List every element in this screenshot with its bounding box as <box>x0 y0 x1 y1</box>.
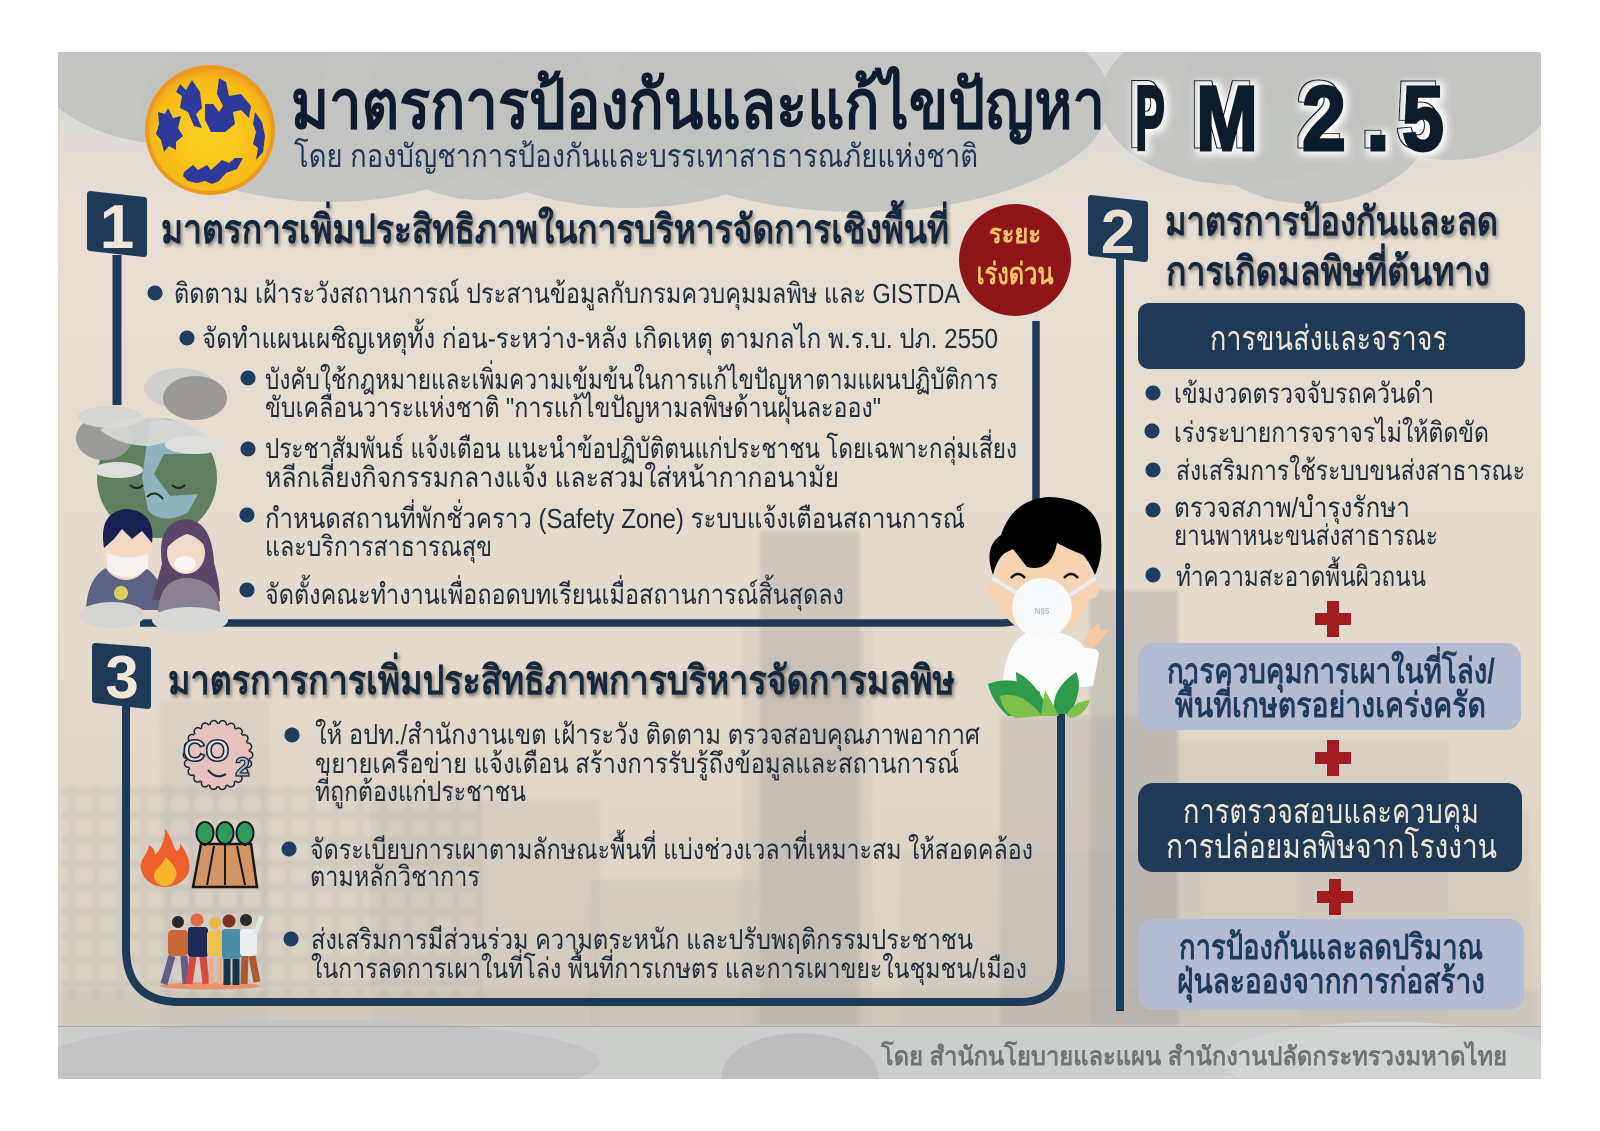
icon: CO2 cloud: CO <box>183 733 230 768</box>
section 1 bullet 2: จัดทำแผนเผชิญเหตุทั้ง ก่อน-ระหว่าง-หลัง เกิดเหตุ ตามกลไก พ.ร.บ. ปภ. 2550 <box>202 318 998 356</box>
icon: group of people <box>160 914 262 990</box>
subtitle: โดย กองบัญชาการป้องกันและบรรเทาสาธารณภัยแห่งชาติ <box>294 138 978 174</box>
box: open burning control <box>1138 643 1521 730</box>
section 2 badge: 2 <box>1101 198 1135 267</box>
section 3 bullet 3: ส่งเสริมการมีส่วนร่วม ความตระหนัก และปรับพฤติกรรมประชาชน <box>311 924 973 955</box>
section 2 badge <box>1091 198 1145 267</box>
section 3 bullet 3: ในการลดการเผาในที่โล่ง พื้นที่การเกษตร และการเผาขยะในชุมชน/เมือง <box>311 948 1027 986</box>
icon: farmland with three trees <box>193 822 257 887</box>
title: PM 2.5 block lettering: . <box>1366 68 1390 170</box>
background: smog clouds in header <box>58 52 1541 212</box>
section 2 list: ทำความสะอาดพื้นผิวถนน <box>1176 556 1426 592</box>
section 2 heading: มาตรการป้องกันและลด <box>1165 200 1498 244</box>
background: hazy city skyline <box>58 531 1541 1026</box>
section 3 badge: 3 <box>105 644 139 711</box>
section 3 bullet 3 <box>284 924 1027 986</box>
section 1 badge: 1 <box>100 193 134 262</box>
urgent badge: เร่งด่วน <box>976 258 1054 291</box>
section 2 heading: การเกิดมลพิษที่ต้นทาง <box>1166 243 1490 294</box>
title: PM 2.5 block lettering <box>1135 68 1444 170</box>
section 2 list: ส่งเสริมการใช้ระบบขนส่งสาธารณะ <box>1176 454 1525 486</box>
plus icon <box>1315 601 1351 637</box>
section 1 bullet 3 <box>240 360 998 425</box>
box: factory emissions: การปล่อยมลพิษจากโรงงาน <box>1166 827 1497 866</box>
section 1 bullet 4 <box>240 429 1017 493</box>
section 3 bullet 1: ที่ถูกต้องแก่ประชาชน <box>315 772 526 809</box>
section 1 bullet 3: บังคับใช้กฎหมายและเพิ่มความเข้มข้นในการแก้ไขปัญหาตามแผนปฏิบัติการ <box>265 360 998 395</box>
plus icon <box>1315 740 1351 776</box>
box: construction dust: ฝุ่นละอองจากการก่อสร้าง <box>1177 962 1485 1003</box>
plus icon <box>1317 879 1353 915</box>
box: transport and traffic: การขนส่งและจราจร <box>1210 320 1447 358</box>
title: มาตรการป้องกันและแก้ไขปัญหา <box>291 65 1105 145</box>
box: transport and traffic <box>1138 303 1525 369</box>
section 2 list <box>1144 378 1525 592</box>
section 3 frame line <box>126 705 1061 1002</box>
section 3 bullet 2: จัดระเบียบการเผาตามลักษณะพื้นที่ แบ่งช่วงเวลาที่เหมาะสม ให้สอดคล้อง <box>310 829 1033 865</box>
section 3 badge <box>95 644 148 711</box>
section 3 bullet 1: ขยายเครือข่าย แจ้งเตือน สร้างการรับรู้ถึงข้อมูลและสถานการณ์ <box>315 748 959 781</box>
section 1 frame line <box>117 255 1036 623</box>
section 1 bullet 5: และบริการสาธารณสุข <box>265 531 492 564</box>
section 2 list: เร่งระบายการจราจรไม่ให้ติดขัด <box>1174 416 1489 448</box>
illustration: sad earth and masked people in smog <box>76 368 228 633</box>
title: PM 2.5 block lettering: M <box>1196 68 1258 170</box>
title: PM 2.5 block lettering: P <box>1135 68 1165 170</box>
section 3 heading: มาตรการการเพิ่มประสิทธิภาพการบริหารจัดการมลพิษ <box>168 652 955 703</box>
box: factory emissions: การตรวจสอบและควบคุม <box>1183 793 1479 832</box>
section 1 bullet 3: ขับเคลื่อนวาระแห่งชาติ "การแก้ไขปัญหามลพิษด้านฝุ่นละออง" <box>265 388 881 425</box>
box: open burning control: พื้นที่เกษตรอย่างเคร่งครัด <box>1175 679 1486 725</box>
icon: CO2 cloud: 2 <box>235 752 250 782</box>
illustration: masked man with leaves <box>987 497 1110 718</box>
footer band <box>58 1020 1541 1079</box>
box: construction dust <box>1138 919 1524 1010</box>
section 1 badge <box>90 193 144 262</box>
section 2 heading <box>1165 200 1498 294</box>
section 1 bullet 4: ประชาสัมพันธ์ แจ้งเตือน แนะนำข้อปฏิบัติตนแก่ประชาชน โดยเฉพาะกลุ่มเสี่ยง <box>265 429 1017 466</box>
title: PM 2.5 block lettering: 5 <box>1402 68 1444 170</box>
section 3 bullet 1: ให้ อปท./สำนักงานเขต เฝ้าระวัง ติดตาม ตรวจสอบคุณภาพอากาศ <box>315 718 980 752</box>
urgent badge <box>959 204 1071 316</box>
section 1 bullet 4: หลีกเลี่ยงกิจกรรมกลางแจ้ง และสวมใส่หน้ากากอนามัย <box>265 458 839 493</box>
section 1 bullet 1: ติดตาม เฝ้าระวังสถานการณ์ ประสานข้อมูลกับกรมควบคุมมลพิษ และ GISTDA <box>174 278 960 311</box>
emblem: Ministry of Interior seal <box>145 65 275 195</box>
box: construction dust: การป้องกันและลดปริมาณ <box>1179 928 1483 967</box>
section 1 heading: มาตรการเพิ่มประสิทธิภาพในการบริหารจัดการเชิงพื้นที่ <box>161 200 949 252</box>
section 3 bullet 2: ตามหลักวิชาการ <box>310 861 480 892</box>
icon: fire <box>141 829 190 887</box>
section 2 list: ตรวจสภาพ/บำรุงรักษา <box>1174 492 1410 525</box>
section 2 list: เข้มงวดตรวจจับรถควันดำ <box>1174 378 1434 409</box>
footer credit: โดย สำนักนโยบายและแผน สำนักงานปลัดกระทรวงมหาดไทย <box>880 1040 1507 1071</box>
section 2 frame line <box>1116 258 1124 1011</box>
section 3 bullet 2 <box>282 829 1033 892</box>
section 1 bullet 6: จัดตั้งคณะทำงานเพื่อถอดบทเรียนเมื่อสถานการณ์สิ้นสุดลง <box>265 574 844 612</box>
section 1 bullet 5 <box>240 499 965 564</box>
urgent badge: ระยะ <box>989 219 1041 249</box>
title: PM 2.5 block lettering: 2 <box>1302 68 1346 170</box>
section 3 bullet 1 <box>284 718 980 809</box>
illustration: masked man with leaves: N95 <box>1035 607 1050 616</box>
section 2 list: ยานพาหนะขนส่งสาธารณะ <box>1174 520 1438 551</box>
icon: CO2 cloud <box>183 724 250 786</box>
section 1 bullet 5: กำหนดสถานที่พักชั่วคราว (Safety Zone) ระบบแจ้งเตือนสถานการณ์ <box>265 499 965 534</box>
section 1 bullet 6 <box>240 574 844 612</box>
box: open burning control: การควบคุมการเผาในที่โล่ง/ <box>1167 646 1495 693</box>
box: factory emissions <box>1138 783 1522 872</box>
